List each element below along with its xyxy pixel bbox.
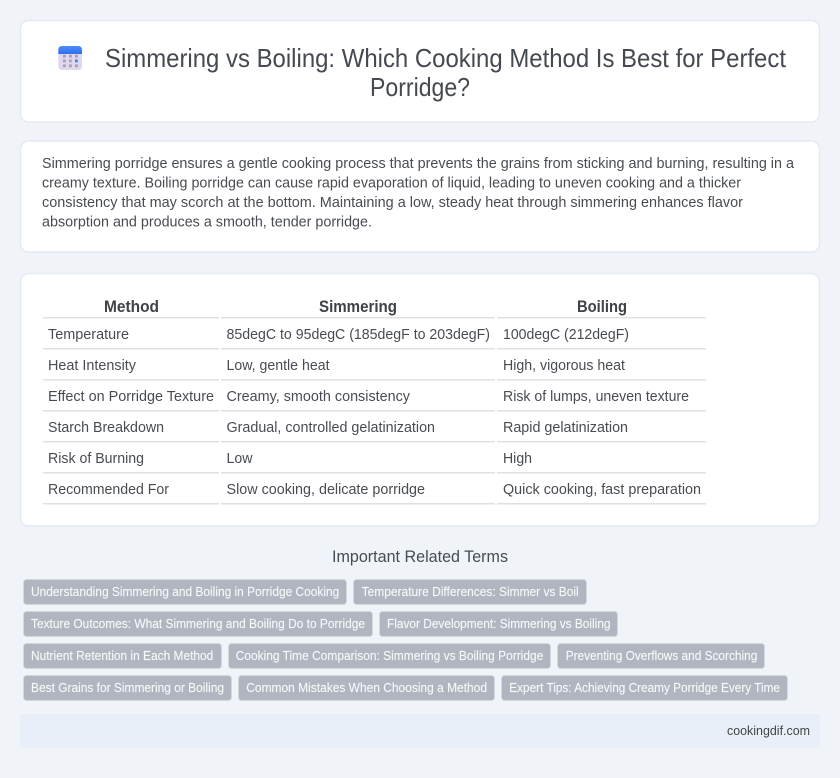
table header: Method <box>104 298 159 316</box>
text block: introduction: creamy texture. Boiling porridge can cause rapid evaporation of liquid, leading to uneven cooking and a thicker <box>42 174 741 192</box>
tag: Preventing Overflows and Scorching <box>566 648 757 663</box>
table row: heat intensity: Low, gentle heat <box>226 358 330 374</box>
table row: starch breakdown: Rapid gelatinization <box>503 420 628 436</box>
title: Porridge? <box>370 72 470 102</box>
table header: Boiling <box>577 298 627 316</box>
table row: temperature: 100degC (212degF) <box>503 327 629 343</box>
table row: risk of burning: Low <box>226 451 253 467</box>
tag <box>24 676 232 700</box>
table header: Simmering <box>319 298 397 316</box>
tag <box>24 612 372 636</box>
table row: risk of burning: Risk of Burning <box>48 451 144 467</box>
footer: cookingdif.com <box>727 723 810 738</box>
table row: effect on porridge texture: Creamy, smooth consistency <box>226 389 411 405</box>
table row: recommended for: Quick cooking, fast preparation <box>503 482 701 498</box>
table row: heat intensity <box>48 358 625 374</box>
table row: effect on porridge texture: Effect on Porridge Texture <box>48 389 214 405</box>
table row: recommended for: Slow cooking, delicate porridge <box>226 482 425 498</box>
panel: introduction <box>20 141 820 252</box>
icon: calendar <box>58 46 82 70</box>
title: Simmering vs Boiling: Which Cooking Method Is Best for Perfect <box>105 43 787 73</box>
panel: comparison table <box>20 274 820 526</box>
text block: introduction: Simmering porridge ensures a gentle cooking process that prevents the grains from sticking and burning, resulting in a <box>42 155 795 172</box>
text block: introduction: consistency that may scorch at the bottom. Maintaining a low, steady heat through simmering enhances flavor <box>42 194 743 211</box>
table row: heat intensity: Heat Intensity <box>48 358 137 374</box>
table row: risk of burning <box>48 451 532 467</box>
table row: temperature: 85degC to 95degC (185degF to 203degF) <box>226 327 490 343</box>
table row: heat intensity: High, vigorous heat <box>503 358 625 374</box>
tag: Expert Tips: Achieving Creamy Porridge Every Time <box>509 680 780 695</box>
table row: starch breakdown: Starch Breakdown <box>48 420 164 436</box>
tag <box>380 612 618 636</box>
tag: Nutrient Retention in Each Method <box>31 648 213 663</box>
tag: Common Mistakes When Choosing a Method <box>246 680 487 695</box>
table row: temperature <box>48 327 629 343</box>
tag <box>228 644 550 668</box>
tag: Cooking Time Comparison: Simmering vs Boiling Porridge <box>236 648 543 663</box>
text block: introduction <box>42 155 795 230</box>
tag <box>24 644 222 668</box>
tag <box>558 644 764 668</box>
footer <box>20 714 820 748</box>
table row: recommended for <box>48 482 701 498</box>
tag: Flavor Development: Simmering vs Boiling <box>387 616 610 631</box>
tag <box>24 580 346 604</box>
panel: related term tags <box>24 580 788 700</box>
title <box>105 43 787 102</box>
tag: Best Grains for Simmering or Boiling <box>31 680 224 695</box>
table row: temperature: Temperature <box>48 327 129 343</box>
tag <box>354 580 586 604</box>
table row: effect on porridge texture: Risk of lumps, uneven texture <box>503 389 689 405</box>
tag <box>238 676 494 700</box>
text block: introduction: absorption and produces a smooth, tender porridge. <box>42 214 372 230</box>
tag: Texture Outcomes: What Simmering and Boiling Do to Porridge <box>31 616 365 631</box>
table row: starch breakdown: Gradual, controlled gelatinization <box>226 420 435 436</box>
tag: Understanding Simmering and Boiling in Porridge Cooking <box>31 584 339 599</box>
table row: starch breakdown <box>48 420 628 436</box>
table header <box>104 298 627 316</box>
tag <box>502 676 788 700</box>
table row: effect on porridge texture <box>48 389 689 405</box>
heading: related terms: Important Related Terms <box>332 548 508 566</box>
table row: recommended for: Recommended For <box>48 482 169 498</box>
table row: risk of burning: High <box>503 451 532 467</box>
tag: Temperature Differences: Simmer vs Boil <box>362 584 579 599</box>
panel: header <box>20 20 820 122</box>
